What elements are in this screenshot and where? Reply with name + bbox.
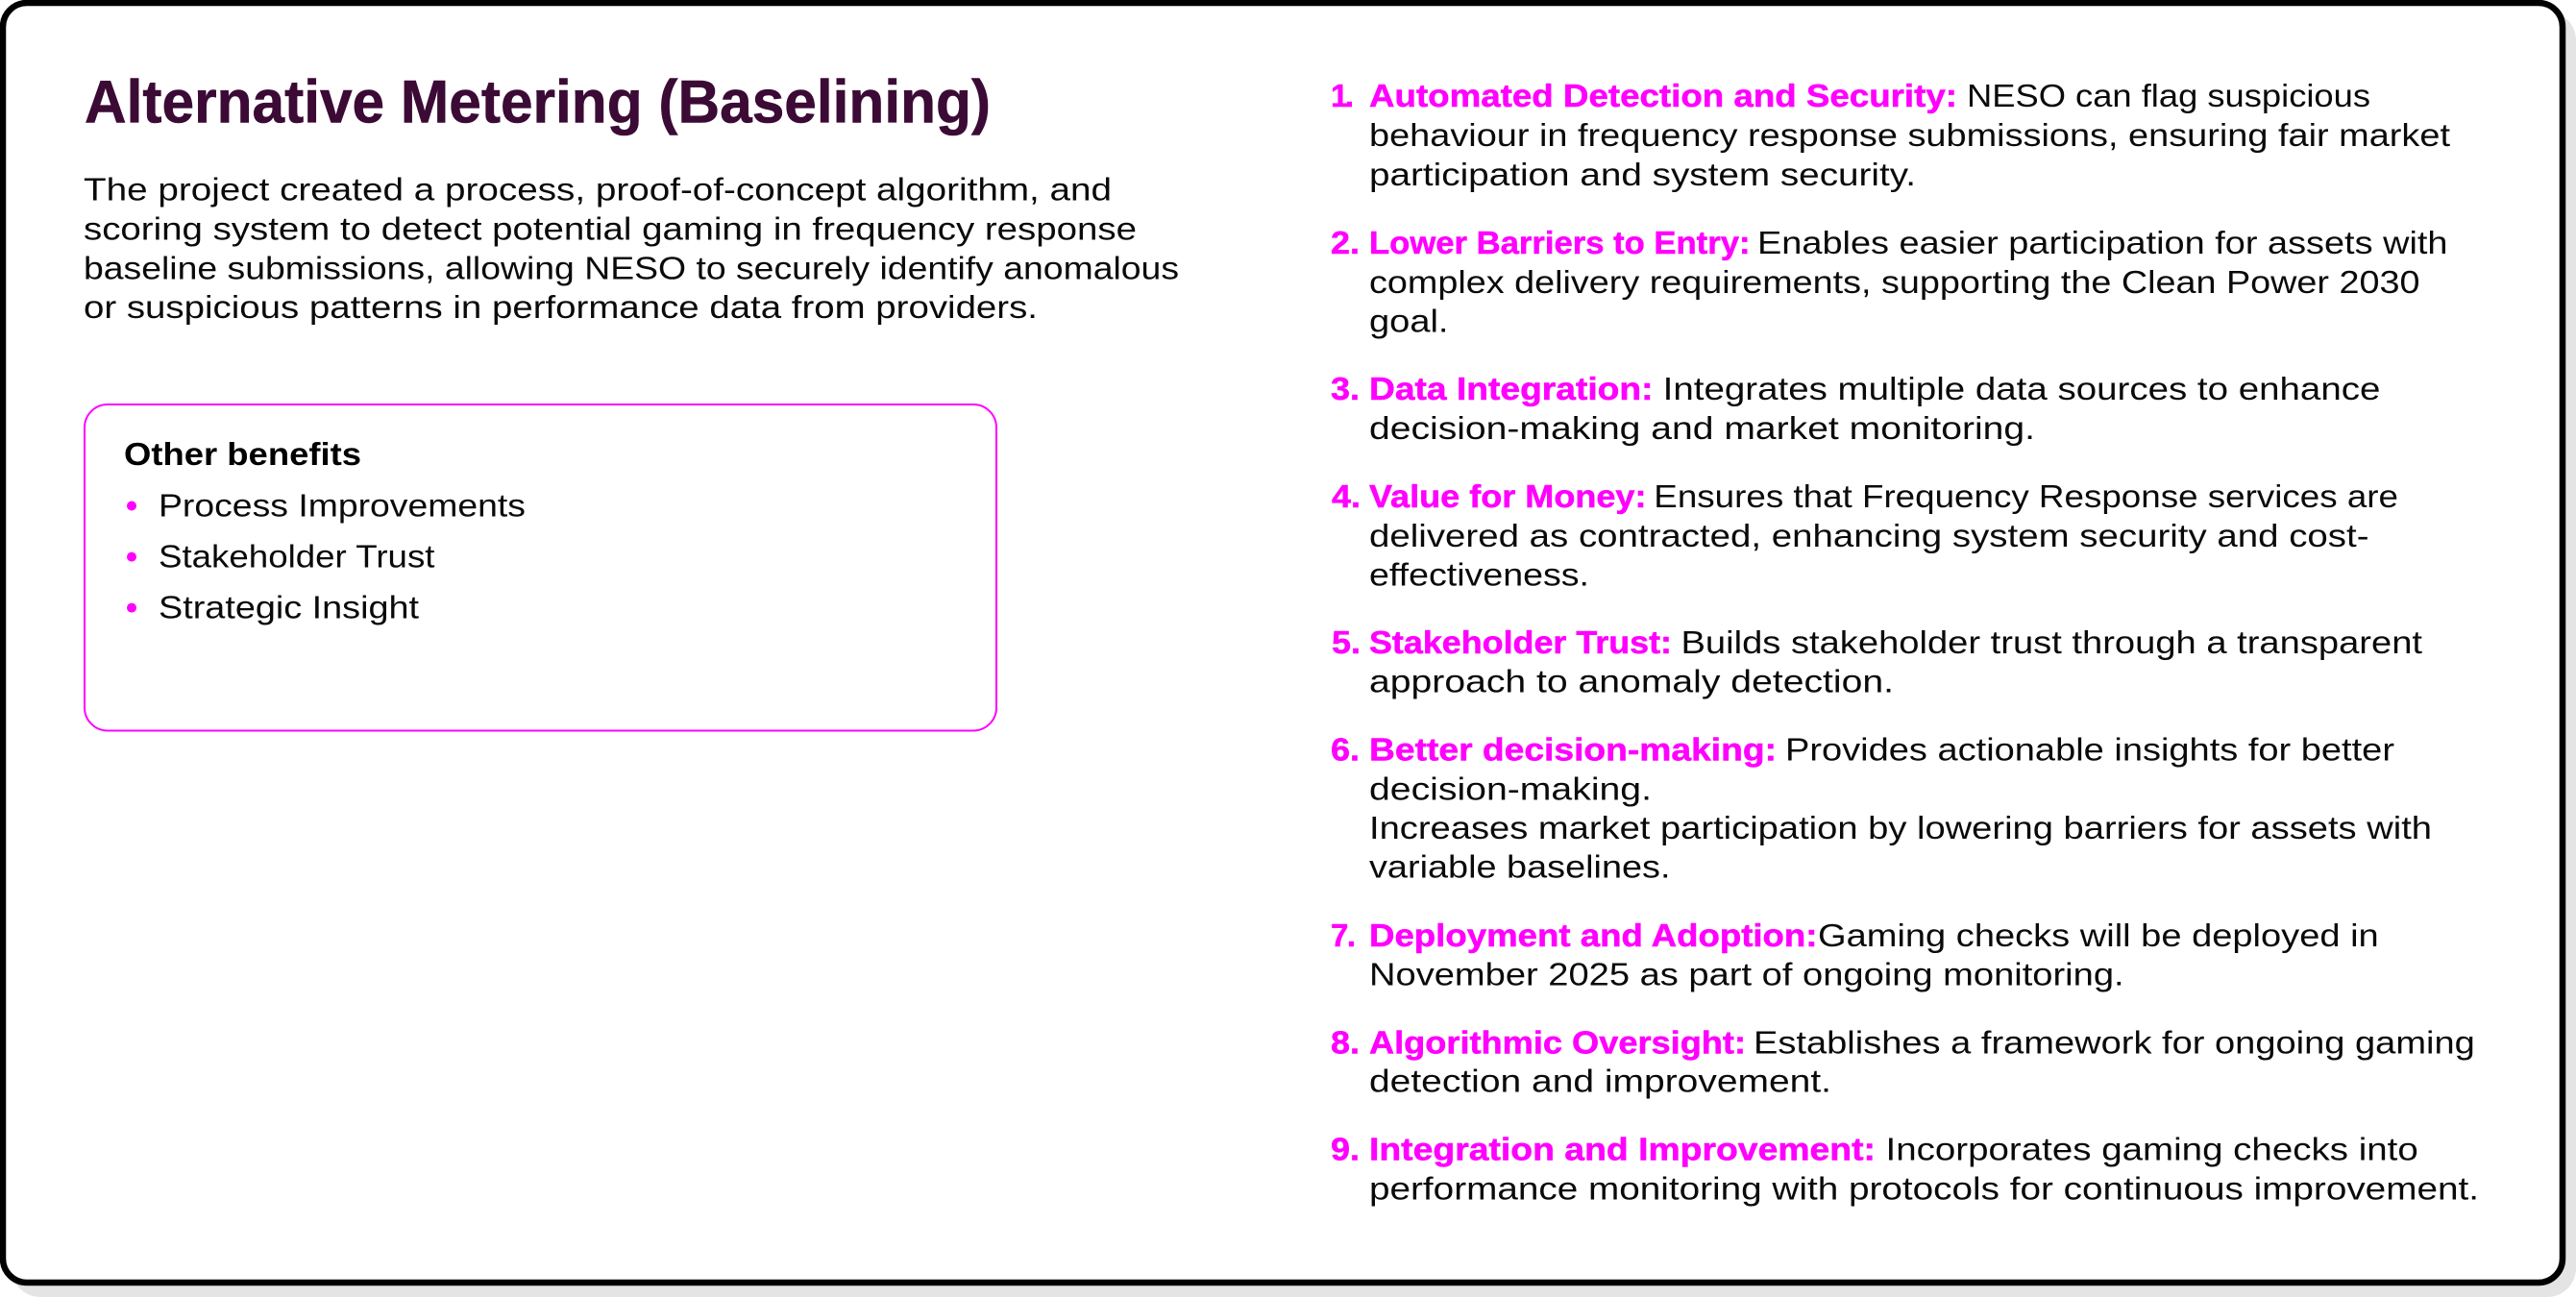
- item 3: data integration: Data Integration:: [1369, 371, 1653, 406]
- item 2: lower barriers to entry: Enables easier participation for assets with: [1757, 225, 2448, 260]
- item 9: integration and improvement: performance monitoring with protocols for continuous improvement.: [1369, 1171, 2479, 1207]
- benefits box outline: [85, 404, 996, 730]
- item 8: algorithmic oversight: [1331, 1024, 2475, 1099]
- item 4: value for money: [1332, 478, 2398, 592]
- intro paragraph: scoring system to detect potential gaming in frequency response: [84, 211, 1137, 246]
- item 2: lower barriers to entry: Lower Barriers to Entry:: [1369, 225, 1751, 260]
- item 9: integration and improvement: [1331, 1132, 2479, 1207]
- item 3: data integration: Integrates multiple data sources to enhance: [1663, 371, 2380, 406]
- intro paragraph: or suspicious patterns in performance data from providers.: [84, 289, 1038, 325]
- item 2: lower barriers to entry: [1331, 225, 2448, 338]
- item 4: value for money: effectiveness.: [1369, 557, 1589, 592]
- item 2: lower barriers to entry: goal.: [1369, 304, 1449, 338]
- item 1: automated detection and security: participation and system security.: [1369, 157, 1916, 192]
- item 1: automated detection and security: behaviour in frequency response submissions, ensuring fair market: [1369, 117, 2450, 153]
- benefits heading: Other benefits: [124, 436, 361, 472]
- benefit: process improvements: Process Improvements: [159, 487, 526, 523]
- benefit: strategic insight: Strategic Insight: [159, 589, 419, 624]
- item 6: better decision-making: 6.: [1331, 732, 1360, 767]
- item 9: integration and improvement: Integration and Improvement:: [1369, 1132, 1876, 1166]
- item 9: integration and improvement: Incorporates gaming checks into: [1885, 1132, 2418, 1166]
- item 3: data integration: decision-making and market monitoring.: [1369, 410, 2035, 446]
- intro paragraph: baseline submissions, allowing NESO to securely identify anomalous: [84, 250, 1179, 286]
- item 5: stakeholder trust: Builds stakeholder trust through a transparent: [1681, 624, 2422, 660]
- item 7: deployment and adoption: Deployment and Adoption:: [1369, 918, 1818, 953]
- item 4: value for money: delivered as contracted, enhancing system security and cost-: [1369, 518, 2369, 553]
- title: Alternative Metering (Baselining): [85, 69, 991, 136]
- item 1: automated detection and security: 1.: [1331, 78, 1354, 113]
- item 7: deployment and adoption: [1331, 918, 2379, 991]
- item 7: deployment and adoption: 7.: [1331, 918, 1356, 953]
- item 3: data integration: [1331, 371, 2380, 446]
- item 6: better decision-making: [1331, 732, 2432, 884]
- item 3: data integration: 3.: [1331, 371, 1360, 406]
- item 5: stakeholder trust: Stakeholder Trust:: [1369, 624, 1672, 660]
- intro paragraph: [84, 171, 1179, 325]
- item 1: automated detection and security: Automated Detection and Security:: [1369, 78, 1957, 113]
- item 7: deployment and adoption: November 2025 as part of ongoing monitoring.: [1369, 956, 2124, 991]
- item 6: better decision-making: variable baselines.: [1369, 849, 1670, 884]
- numbered benefits list: [1331, 78, 2479, 1207]
- item 5: stakeholder trust: [1332, 624, 2422, 699]
- item 4: value for money: Ensures that Frequency Response services are: [1654, 478, 2398, 514]
- item 6: better decision-making: Better decision-making:: [1369, 732, 1777, 767]
- item 9: integration and improvement: 9.: [1331, 1132, 1360, 1166]
- item 4: value for money: Value for Money:: [1369, 478, 1647, 514]
- item 1: automated detection and security: [1331, 78, 2450, 192]
- item 4: value for money: 4.: [1332, 478, 1361, 514]
- item 2: lower barriers to entry: 2.: [1331, 225, 1360, 260]
- item 7: deployment and adoption: Gaming checks will be deployed in: [1818, 918, 2379, 953]
- panel: other benefits: [85, 404, 996, 730]
- item 6: better decision-making: decision-making.: [1369, 771, 1652, 806]
- intro paragraph: The project created a process, proof-of-concept algorithm, and: [84, 171, 1112, 208]
- item 6: better decision-making: Provides actionable insights for better: [1785, 732, 2394, 767]
- item 5: stakeholder trust: approach to anomaly detection.: [1369, 663, 1894, 699]
- item 8: algorithmic oversight: Establishes a framework for ongoing gaming: [1754, 1024, 2475, 1060]
- item 1: automated detection and security: NESO can flag suspicious: [1967, 78, 2370, 113]
- item 8: algorithmic oversight: Algorithmic Oversight:: [1369, 1024, 1746, 1060]
- item 5: stakeholder trust: 5.: [1332, 624, 1361, 660]
- item 2: lower barriers to entry: complex delivery requirements, supporting the Clean Power 2030: [1369, 264, 2419, 300]
- benefit: stakeholder trust: Stakeholder Trust: [159, 538, 434, 574]
- item 6: better decision-making: Increases market participation by lowering barriers for assets with: [1369, 810, 2432, 845]
- item 8: algorithmic oversight: detection and improvement.: [1369, 1064, 1831, 1099]
- item 8: algorithmic oversight: 8.: [1331, 1024, 1360, 1060]
